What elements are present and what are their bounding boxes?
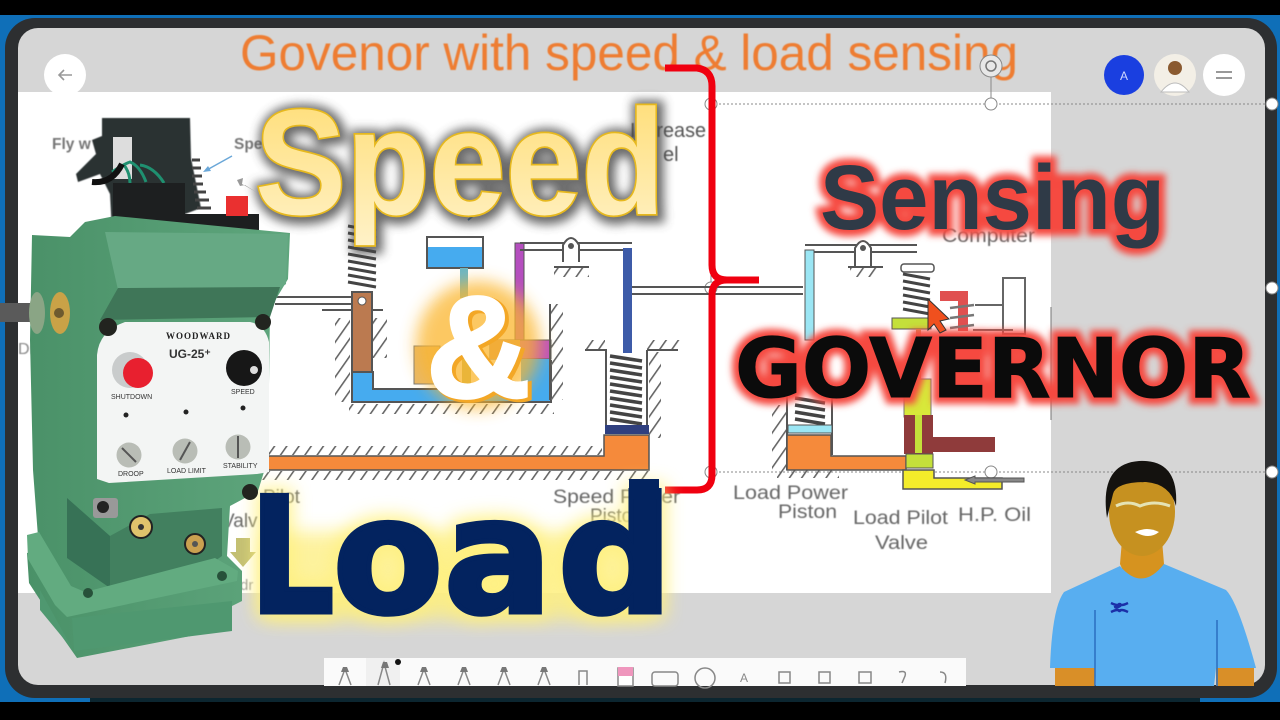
glasses xyxy=(1116,503,1170,506)
piston stem xyxy=(414,346,440,384)
diagram text labels: dr xyxy=(240,577,253,594)
green governor product: SPEED xyxy=(231,389,255,396)
back button xyxy=(44,54,86,96)
slide white area xyxy=(18,92,1051,593)
orange oil line xyxy=(262,435,649,470)
green main body xyxy=(27,216,290,658)
base plate top edge xyxy=(27,532,238,617)
diagram text labels: Computer xyxy=(942,226,1036,247)
red shutdown button xyxy=(112,352,148,388)
heading: Speed: Speed xyxy=(257,80,667,248)
orange oil chamber xyxy=(787,435,906,470)
H.P. oil arrow xyxy=(965,476,1024,484)
user avatars and menu xyxy=(1104,54,1245,96)
heading: Speed: Speed xyxy=(255,78,665,246)
diagram labels behind product: Increase xyxy=(630,120,706,142)
brown piston xyxy=(352,292,372,372)
drain arrow xyxy=(230,538,256,567)
diagram labels behind product: el xyxy=(663,144,679,166)
neck xyxy=(1120,540,1164,584)
diagram text labels: Load Pilot xyxy=(853,508,949,529)
recessed shadow face xyxy=(100,287,280,320)
panel dials xyxy=(116,442,142,468)
pilot valve stem xyxy=(904,379,931,417)
wires xyxy=(112,162,164,183)
lower brass fittings xyxy=(93,498,118,518)
shutdown label: SHUTDOWN xyxy=(111,394,152,401)
diagram labels behind product: Spe xyxy=(234,136,263,153)
white instrument panel xyxy=(97,322,269,483)
diagram text labels: Pilot xyxy=(263,487,301,508)
panel model text: UG-25⁺ xyxy=(169,347,211,361)
presenter photo xyxy=(1050,461,1256,686)
diagram text labels: Valv xyxy=(222,511,258,532)
panel brand text: WOODWARD xyxy=(166,331,231,341)
reservoir xyxy=(427,237,483,268)
bottom black bar xyxy=(0,702,1280,720)
diagram text labels: Load Power xyxy=(733,483,849,504)
purple rod and chamber xyxy=(515,243,524,343)
heading: GOVERNOR: GOVERNOR xyxy=(735,322,1251,417)
heading glow: Load background: L xyxy=(250,463,334,650)
walking beam and pivot xyxy=(520,243,632,250)
yellow-green spring seat xyxy=(892,318,931,329)
diagram text labels xyxy=(222,226,1036,594)
dial labels: DROOP xyxy=(118,471,144,478)
heading: Load: oad xyxy=(333,463,673,650)
logo on shirt xyxy=(1111,603,1128,612)
heading: ampersand: & xyxy=(429,268,534,430)
label on actuator xyxy=(113,137,132,179)
dark strip below frame xyxy=(90,698,1200,702)
red electric actuator xyxy=(940,291,968,331)
diagram text labels: H.P. Oil xyxy=(958,505,1031,526)
diagram labels behind product: Fly w xyxy=(52,136,92,153)
top black bar xyxy=(0,0,1280,15)
dark red return line xyxy=(904,415,995,454)
black top actuator xyxy=(76,118,201,232)
red button xyxy=(226,196,248,216)
red brace xyxy=(665,68,759,490)
face xyxy=(1109,468,1175,556)
wall hatch speed servo xyxy=(549,304,551,400)
load sensing diagram xyxy=(772,241,1025,489)
diagram text labels: Speed Power xyxy=(553,487,681,508)
left side fitting bolts xyxy=(0,303,38,322)
green governor product xyxy=(0,118,290,658)
mouth xyxy=(1135,529,1159,536)
diagram text labels: Valve xyxy=(875,533,928,554)
heading glow: Load background: oad xyxy=(333,463,673,650)
diagram text labels: Piston xyxy=(590,506,643,527)
arms xyxy=(1055,665,1095,686)
shirt xyxy=(1050,564,1256,686)
yellow high pressure inlet xyxy=(903,470,1002,489)
speed sensing diagram xyxy=(262,226,803,480)
blue rod xyxy=(623,248,632,353)
diagram labels behind product: Dr xyxy=(18,341,36,358)
diagram text labels: Piston xyxy=(778,502,837,523)
heading: Load: L xyxy=(250,463,334,650)
terminal box xyxy=(113,183,185,231)
title handwriting: Govenor with speed & load sensing xyxy=(240,25,1018,81)
bottom tool bar xyxy=(324,658,966,688)
green governor product: LOAD LIMIT xyxy=(167,468,207,475)
orange mouse cursor xyxy=(928,299,949,333)
lower dark block faces xyxy=(67,498,110,588)
selection box handles xyxy=(705,55,1278,478)
base plate lower xyxy=(72,601,232,651)
heading: Sensing: Sensing xyxy=(820,147,1165,249)
blue oil channel xyxy=(352,361,551,402)
green governor product: STABILITY xyxy=(223,463,258,470)
light-blue rod xyxy=(805,250,814,340)
speeder spring xyxy=(348,226,376,287)
small pointer arrows xyxy=(203,156,474,220)
speed knob xyxy=(226,350,262,386)
diagram labels behind product xyxy=(18,120,706,358)
load spring xyxy=(901,264,934,272)
user avatars and menu: A xyxy=(1120,69,1128,83)
spring coils xyxy=(192,160,211,208)
front upper face xyxy=(105,232,288,290)
walking beam xyxy=(805,245,917,252)
speed power piston spring xyxy=(585,350,678,433)
load power piston xyxy=(787,396,832,470)
linkage rods xyxy=(275,287,803,304)
heading: GOVERNOR: GOVERNOR xyxy=(735,322,1251,417)
bottom tool bar: A xyxy=(740,671,748,685)
heading: Sensing: Sensing xyxy=(820,147,1165,249)
heading: ampersand: & xyxy=(426,266,531,428)
